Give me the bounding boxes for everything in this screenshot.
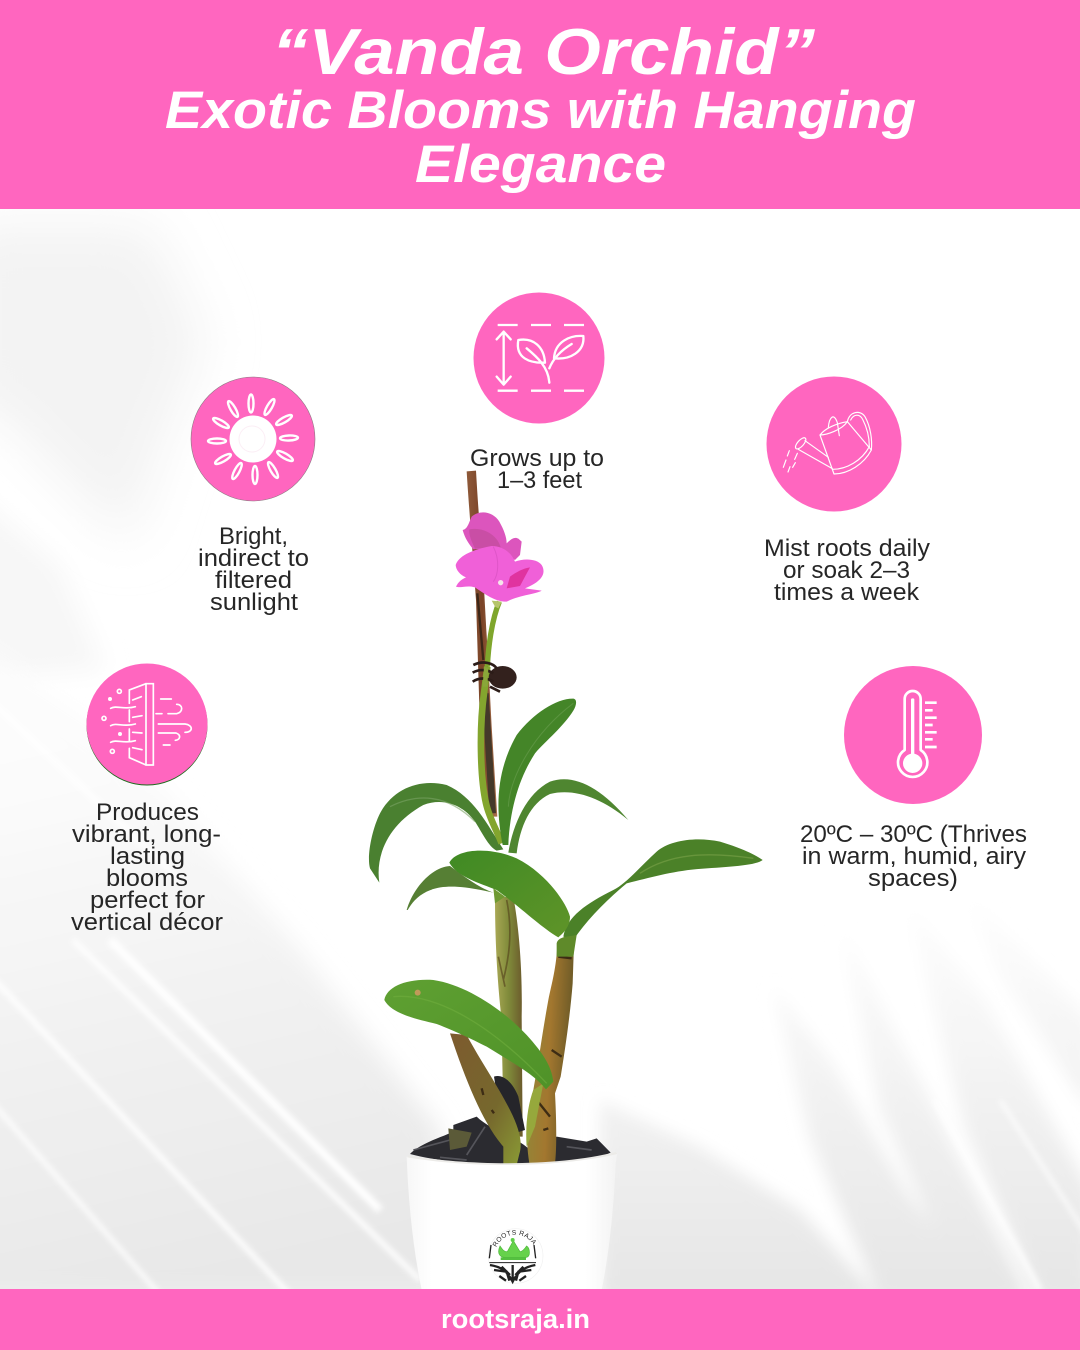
pot logo xyxy=(488,1228,544,1284)
text: blooms: perfect for xyxy=(90,887,205,914)
stake, stem, flowers and upper leaves xyxy=(369,471,763,957)
icon: air flow xyxy=(86,664,208,786)
text: height xyxy=(470,445,604,494)
text: watering: times a week xyxy=(774,579,920,606)
title: “Vanda Orchid” xyxy=(272,15,816,88)
text: blooms: vibrant, long- xyxy=(72,821,221,848)
title: Exotic Blooms with Hanging xyxy=(165,81,916,140)
pot with bark and pseudobulbs xyxy=(384,897,614,1289)
icon: thermometer xyxy=(844,666,982,804)
footer band xyxy=(0,1289,1080,1350)
header band xyxy=(0,0,1080,209)
flower xyxy=(456,546,544,602)
icon: watering can xyxy=(766,376,902,512)
text: watering: or soak 2–3 xyxy=(783,557,910,584)
text: blooms: lasting xyxy=(110,843,185,870)
text: temperature: spaces) xyxy=(868,865,958,892)
text: temperature: 20ºC – 30ºC (Thrives xyxy=(800,821,1027,848)
text: sunlight: sunlight xyxy=(210,589,298,616)
text: blooms: vertical décor xyxy=(71,909,223,936)
text: sunlight: indirect to xyxy=(198,545,309,572)
text: blooms: blooms xyxy=(106,865,188,892)
title: Elegance xyxy=(415,135,666,194)
icon: plant height xyxy=(474,292,604,424)
footer website: rootsraja.in xyxy=(441,1304,590,1334)
text: temperature xyxy=(800,821,1027,892)
root clip xyxy=(473,663,517,692)
icon: sunlight xyxy=(191,377,315,501)
bud xyxy=(463,512,522,560)
text: height: 1–3 feet xyxy=(497,467,582,494)
text: sunlight: filtered xyxy=(215,567,292,594)
text: blooms: Produces xyxy=(96,799,199,826)
text: watering xyxy=(764,535,931,606)
title xyxy=(165,15,916,194)
potted orchid plant xyxy=(368,470,762,1289)
text: watering: Mist roots daily xyxy=(764,535,931,562)
text: sunlight xyxy=(198,523,309,616)
text: temperature: in warm, humid, airy xyxy=(802,843,1027,870)
text: height: Grows up to xyxy=(470,445,604,472)
text: sunlight: Bright, xyxy=(219,523,288,550)
text: blooms xyxy=(71,799,223,936)
pot logo: ROOTS RAJA xyxy=(492,1230,536,1247)
